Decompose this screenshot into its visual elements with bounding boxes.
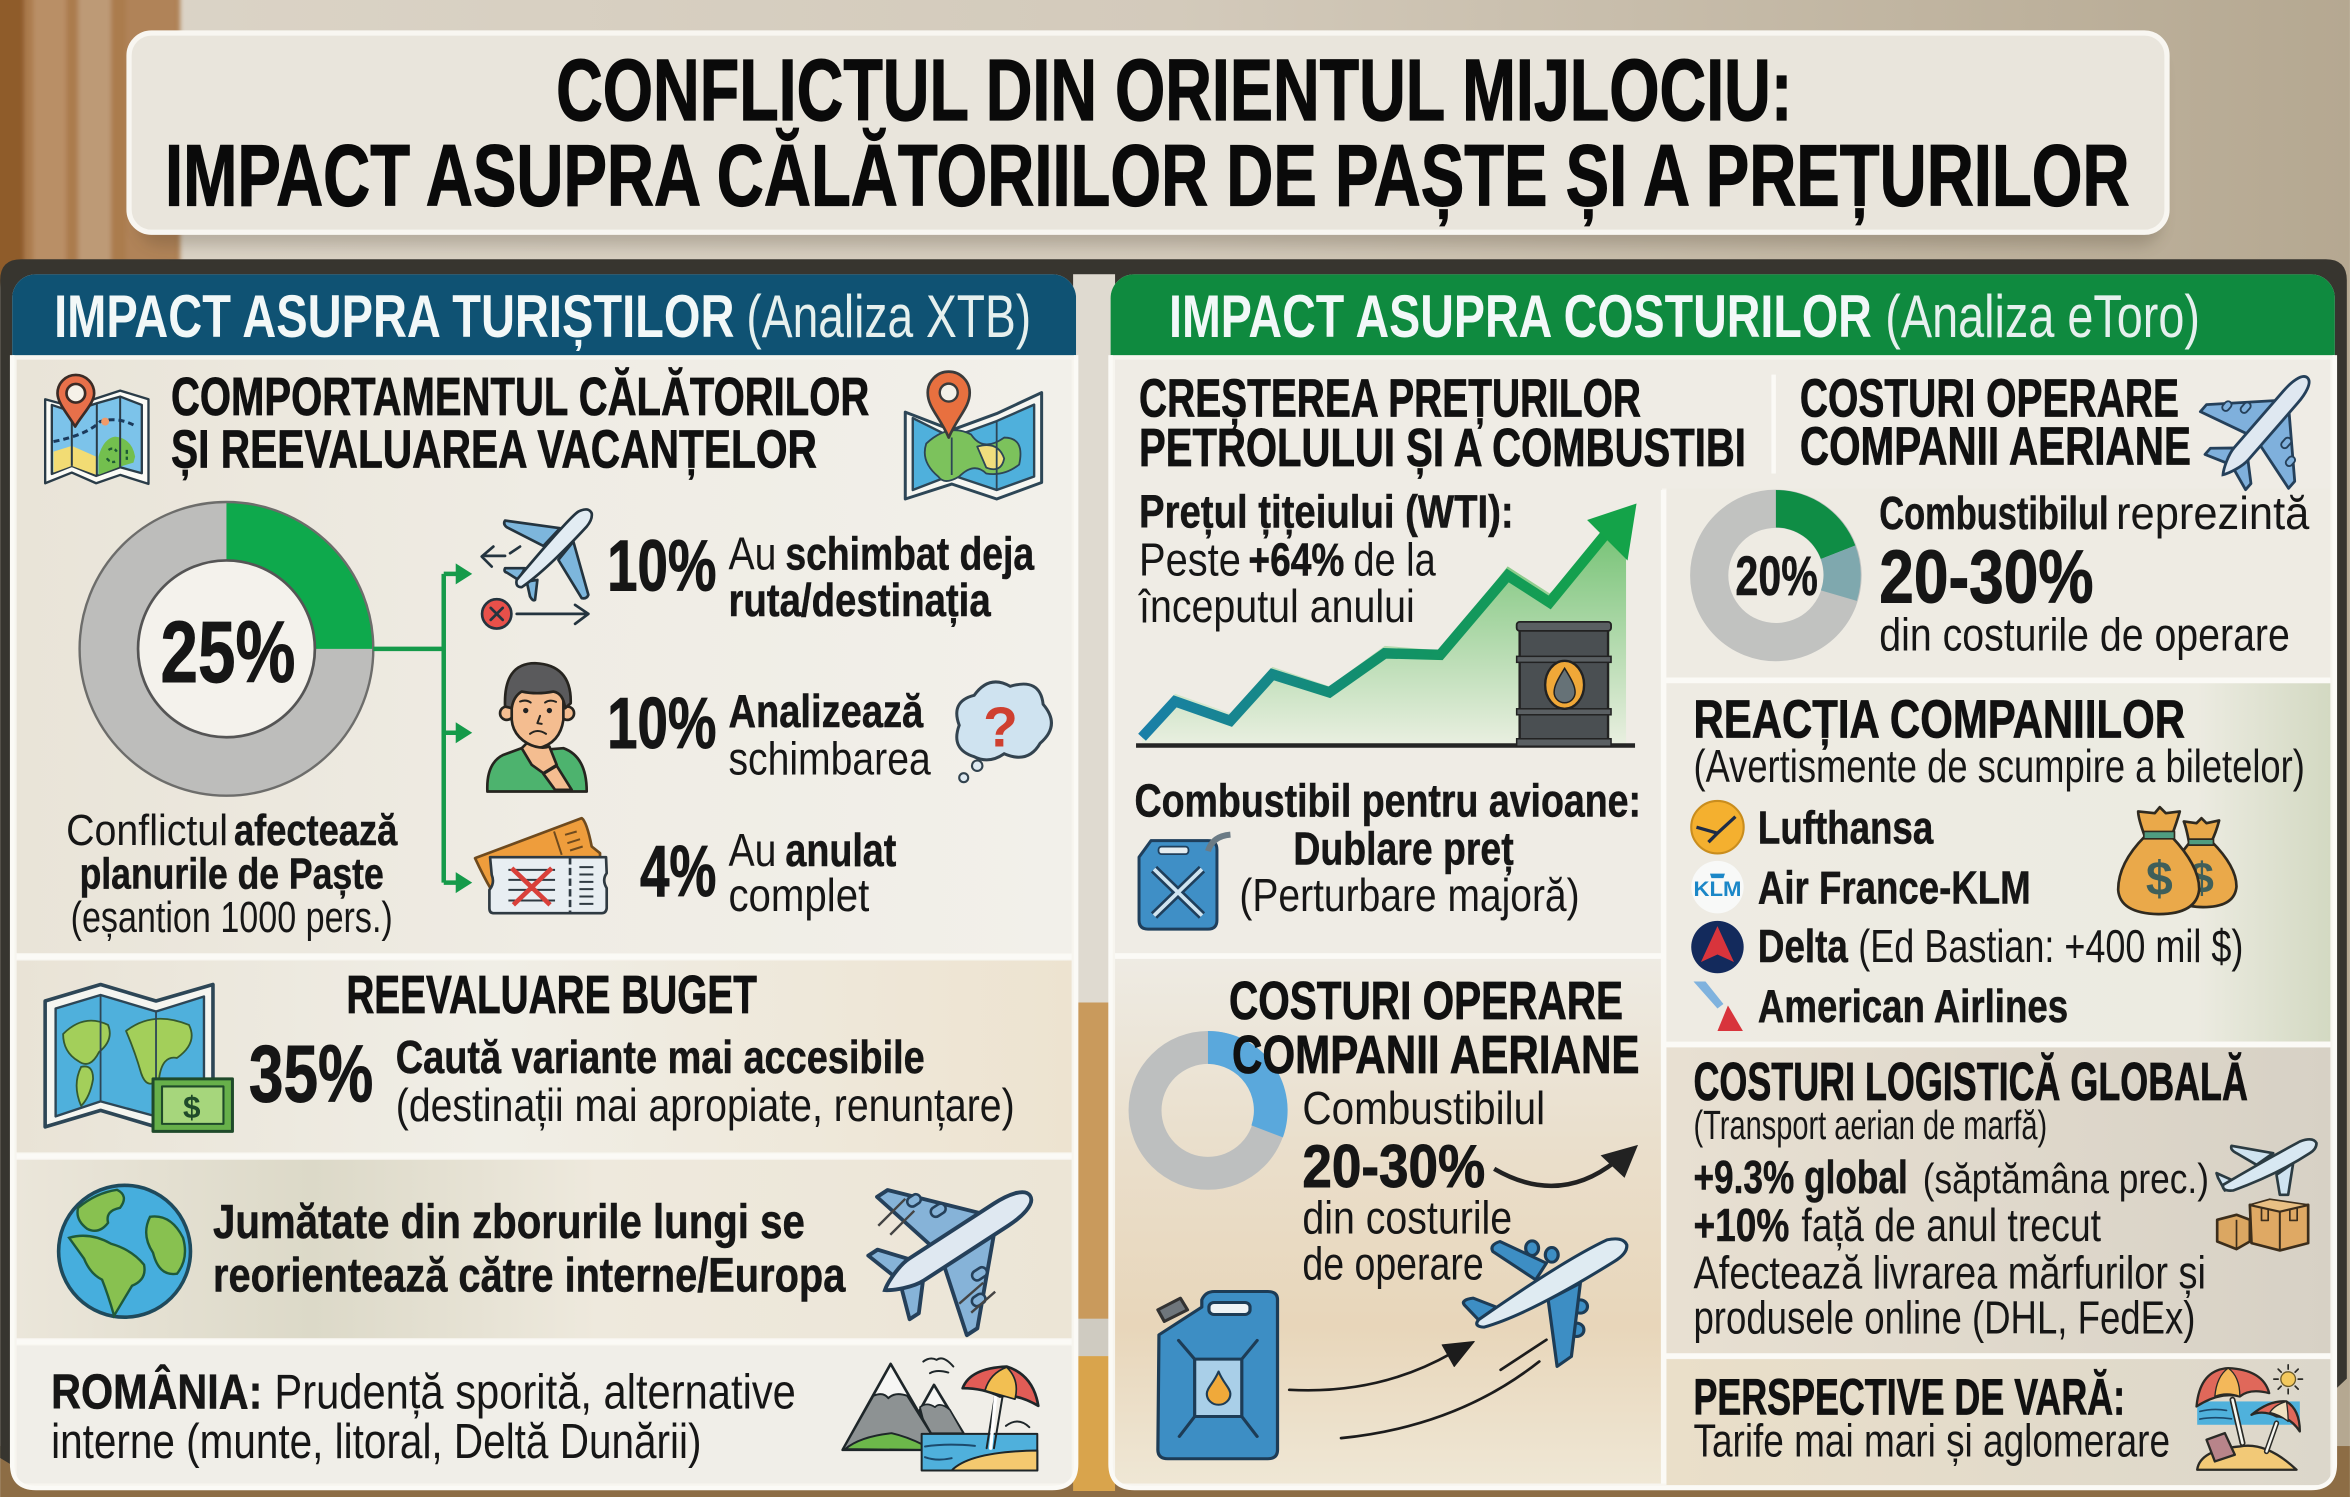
- logo: air france klm: Air France-KLM: [1758, 862, 2031, 914]
- logo: lufthansa: [1691, 801, 1934, 854]
- stat: 4% anulat: complet: [728, 869, 869, 921]
- title box: CONFLICTUL DIN ORIENTUL MIJLOCIU:: [556, 42, 1792, 139]
- panel header right: IMPACT ASUPRA COSTURILOR: [1169, 283, 1872, 350]
- chart: donut 25%: [80, 502, 373, 796]
- stat: 35% variante accesibile: (destinații mai apropiate, renunțare): [396, 1079, 1015, 1131]
- text: perspective de vara: PERSPECTIVE DE VARĂ:: [1693, 1369, 2125, 1426]
- caption: conflictul afecteaza: planurile de Paște: [80, 851, 384, 899]
- panel header left: (Analiza XTB): [746, 283, 1031, 350]
- panel header left: IMPACT ASUPRA TURIȘTILOR: [54, 283, 734, 351]
- stat: 10% schimbat: [607, 526, 1035, 627]
- text: costuri logistica: Afectează livrarea mărfurilor și: [1693, 1247, 2206, 1299]
- panel outlines: [12, 355, 2335, 1488]
- text: combustibil pentru avioane: [1135, 775, 1641, 921]
- logo: air france klm: [1691, 861, 2031, 914]
- icon: folded map right: [905, 372, 1042, 499]
- icon: small jerrycan: [1139, 835, 1230, 929]
- heading: reevaluare buget: REEVALUARE BUGET: [346, 965, 757, 1025]
- text: combustibilul 20-30%: Combustibilul: [1302, 1082, 1545, 1134]
- icon: thought bubble: ?: [983, 695, 1018, 759]
- stat: 10% analizeaza: Analizează: [728, 685, 924, 737]
- icon: cargo plane and boxes: [2217, 1139, 2316, 1250]
- heading: comportamentul calatorilor: ȘI REEVALUAREA VACANȚELOR: [171, 420, 817, 481]
- stat: 35% variante accesibile: [249, 1029, 1015, 1131]
- text: combustibilul 20-30%: din costurile: [1302, 1191, 1512, 1243]
- icon: world map with banknote: [45, 985, 232, 1131]
- text: costuri logistica: față de anul trecut: [1801, 1199, 2101, 1251]
- stat: 35% variante accesibile: Caută variante mai accesibile: [396, 1031, 925, 1083]
- logo: delta: (Ed Bastian: +400 mil $): [1858, 920, 2243, 972]
- icon: world map with banknote: $: [183, 1090, 201, 1125]
- heading: costuri operare top: COMPANII AERIANE: [1800, 417, 2191, 477]
- text: costuri logistica: produsele online (DHL, FedEx): [1693, 1292, 2195, 1344]
- chart: donut 20%: 20%: [1735, 545, 1818, 607]
- heading: costuri operare lower: COMPANII AERIANE: [1232, 1025, 1640, 1085]
- text: perspective de vara: [1693, 1369, 2170, 1467]
- stat: 10% schimbat: Au: [728, 527, 776, 579]
- title box: [129, 33, 2167, 232]
- stat: 10% analizeaza: [607, 684, 931, 785]
- text: jumatate din zboruri: Jumătate din zborurile lungi se: [213, 1196, 805, 1249]
- caption: conflictul afecteaza: (eșantion 1000 pers.): [71, 894, 393, 942]
- text: combustibilul 20-30%: 20-30%: [1302, 1133, 1485, 1200]
- logo: air france klm: KLM: [1693, 878, 1741, 901]
- panel: impact asupra costurilor: [1111, 274, 2350, 1488]
- caption: conflictul afecteaza: Conflictul: [66, 807, 228, 855]
- icon: thought bubble: [957, 682, 1051, 782]
- text: costuri logistica: +9.3% global: [1693, 1151, 1908, 1203]
- stat: 10% analizeaza: 10%: [607, 684, 716, 764]
- text: pretul titeiului: începutul anului: [1137, 580, 1415, 632]
- icon: money bags: $: [2146, 852, 2173, 906]
- icon: jerrycan, arrows and plane: [1158, 1239, 1627, 1459]
- icon: oil barrel: [1517, 622, 1611, 746]
- icon: cancelled ticket: [475, 818, 607, 913]
- text: combustibilul 20-30%: de operare: [1302, 1238, 1484, 1290]
- icon: money bags: $: [2190, 855, 2214, 903]
- caption: conflictul afecteaza: afectează: [234, 807, 398, 855]
- text: combustibil pentru avioane: (Perturbare majoră): [1239, 869, 1580, 921]
- dividers: [17, 490, 2330, 1484]
- arrow: curved up right: [1494, 1145, 1638, 1186]
- icon: plane changed route: [482, 509, 592, 629]
- text: romania: Prudență sporită, alternative: [274, 1365, 796, 1420]
- text: costuri logistica: (săptămâna prec.): [1923, 1155, 2209, 1202]
- icon: plane top right: [2179, 339, 2350, 513]
- logo: lufthansa: Lufthansa: [1758, 802, 1934, 854]
- logo: delta: [1691, 920, 2243, 973]
- text: combustibil pentru avioane: Dublare preț: [1293, 823, 1514, 876]
- arrow: connector to three breakdown rows: [373, 563, 472, 893]
- heading: costuri operare top: [1800, 369, 2191, 477]
- text: pretul titeiului: [1137, 485, 1514, 632]
- text: perspective de vara: Tarife mai mari și aglomerare: [1693, 1415, 2170, 1467]
- text: combustibilul reprezinta: [1879, 487, 2310, 660]
- chart: oil price line rising: [1136, 503, 1637, 748]
- text: pretul titeiului: de la: [1353, 533, 1436, 585]
- text: combustibilul 20-30%: [1302, 1082, 1545, 1290]
- stat: 4% anulat: [640, 824, 896, 921]
- text: romania: [51, 1364, 796, 1469]
- text: combustibil pentru avioane: Combustibil pentru avioane:: [1135, 775, 1641, 827]
- stat: 10% analizeaza: schimbarea: [728, 733, 931, 785]
- heading: comportamentul calatorilor: COMPORTAMENTUL CĂLĂTORILOR: [171, 367, 869, 427]
- heading: cresterea preturilor: [1139, 369, 1746, 479]
- icon: thinking person: [487, 663, 587, 792]
- heading: reactia companiilor: REACȚIA COMPANIILOR: [1693, 689, 2185, 749]
- text: combustibilul reprezinta: reprezintă: [2116, 487, 2310, 539]
- gap between panels: [1073, 274, 1115, 1491]
- heading: reactia companiilor: [1693, 689, 2305, 792]
- stat: 35% variante accesibile: 35%: [249, 1029, 373, 1119]
- text: jumatate din zboruri: reorientează către interne/Europa: [213, 1250, 846, 1303]
- text: jumatate din zboruri: [213, 1196, 846, 1303]
- logo: american airlines: [1693, 980, 2068, 1032]
- stat: 4% anulat: anulat: [785, 824, 896, 876]
- chart: donut 25%: 25%: [161, 604, 295, 701]
- stat: 10% schimbat: schimbat deja: [785, 527, 1035, 579]
- stat: 4% anulat: Au: [728, 824, 776, 876]
- text: pretul titeiului: Prețul țițeiului (WTI):: [1139, 485, 1514, 538]
- icon: money bags: [2118, 807, 2236, 914]
- stat: 10% schimbat: ruta/destinația: [728, 574, 992, 627]
- chart: donut 20%: [1709, 490, 1861, 642]
- icon: plane: [840, 1127, 1075, 1359]
- text: costuri logistica: +10%: [1693, 1199, 1789, 1251]
- text: pretul titeiului: +64%: [1248, 533, 1344, 585]
- heading: cresterea preturilor: CREȘTEREA PREȚURILOR: [1139, 369, 1641, 430]
- logo: delta: Delta: [1758, 920, 1849, 972]
- panel header right: (Analiza eToro): [1885, 283, 2200, 350]
- icon: beach umbrellas: [2197, 1365, 2302, 1470]
- text: romania: interne (munte, litoral, Deltă Dunării): [51, 1414, 701, 1469]
- text: pretul titeiului: Peste: [1139, 533, 1241, 585]
- heading: cresterea preturilor: PETROLULUI ȘI A COMBUSTIBI: [1139, 418, 1746, 479]
- logo: american airlines: American Airlines: [1758, 980, 2068, 1032]
- icon: route map left: [45, 375, 148, 484]
- stat: 4% anulat: 4%: [640, 832, 716, 912]
- caption: conflictul afecteaza: [66, 807, 398, 942]
- panel: impact asupra turistilor: [12, 274, 1076, 1488]
- text: combustibilul reprezinta: 20-30%: [1879, 534, 2094, 618]
- heading: costuri operare lower: COSTURI OPERARE: [1229, 971, 1623, 1031]
- heading: costuri operare lower: [1229, 971, 1640, 1085]
- heading: costuri operare top: COSTURI OPERARE: [1800, 369, 2179, 429]
- text: costuri logistica: [1693, 1052, 2248, 1344]
- title shadow: [138, 51, 2161, 246]
- chart: donut fuel costs: [1145, 1031, 1288, 1173]
- stat: 10% schimbat: 10%: [607, 526, 716, 606]
- icon: mountains and beach: [843, 1358, 1038, 1471]
- text: costuri logistica: (Transport aerian de marfă): [1693, 1102, 2047, 1148]
- icon: globe: [59, 1185, 190, 1317]
- text: combustibilul reprezinta: Combustibilul: [1879, 487, 2109, 539]
- text: romania: ROMÂNIA:: [51, 1364, 262, 1420]
- heading: comportamentul calatorilor: [171, 367, 869, 481]
